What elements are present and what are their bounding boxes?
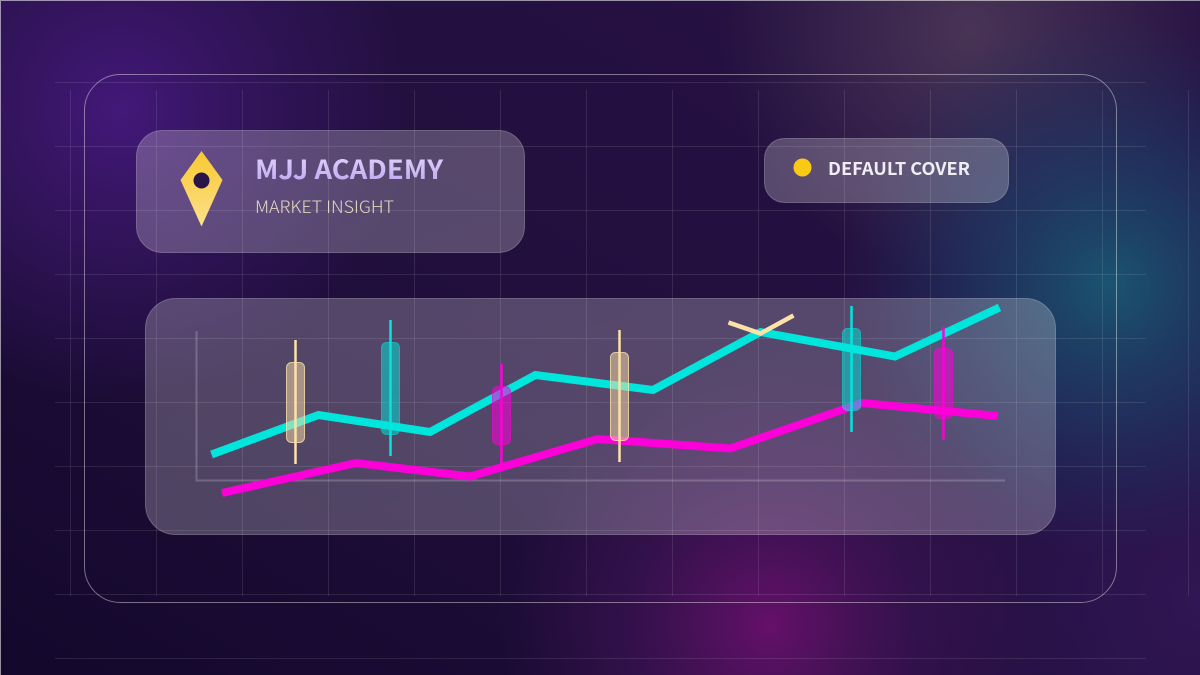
line: cream accent — [728, 316, 794, 334]
subheading: market insight: MARKET INSIGHT — [255, 193, 394, 218]
candlestick: cyan 1 — [382, 320, 400, 456]
panel: default cover badge — [764, 138, 1008, 202]
chart axes — [196, 331, 1005, 480]
icon: yellow dot — [794, 158, 812, 176]
heading: MJJ ACADEMY: MJJ ACADEMY — [255, 148, 444, 187]
candlestick: magenta 1 — [492, 364, 510, 464]
candlestick: cream 1 — [286, 340, 304, 464]
candlestick: cream 2 — [610, 330, 628, 462]
candlestick: magenta 2 — [934, 327, 952, 440]
panel: chart — [146, 298, 1056, 534]
panel: brand — [136, 130, 524, 252]
outer frame panel — [84, 74, 1116, 602]
candlestick: cyan 2 — [842, 306, 860, 432]
icon: location pin — [180, 151, 222, 226]
line: cyan series — [212, 308, 1000, 454]
line: magenta series — [222, 403, 998, 493]
badge label: DEFAULT COVER — [828, 156, 970, 181]
